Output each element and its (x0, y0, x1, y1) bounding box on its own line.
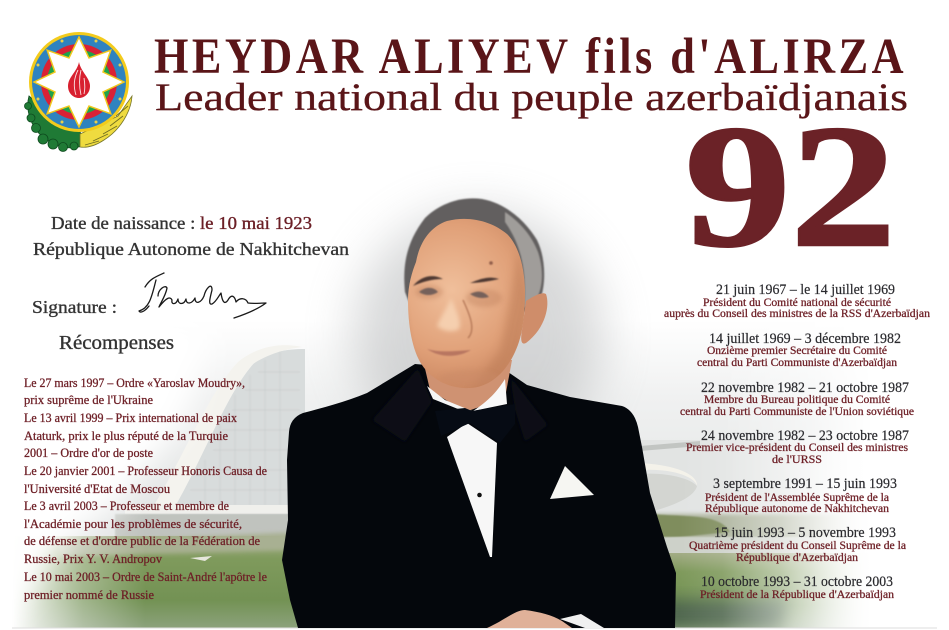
emblem disc: green ring (47, 50, 111, 114)
emblem disc: blue ring (32, 35, 126, 129)
entry 1969-1982: Onzième premier Secrétaire du Comité (707, 345, 887, 357)
left and bottom page margin (0, 300, 949, 630)
awards heading: Récompenses (59, 332, 174, 354)
grey side hair (505, 212, 542, 308)
entry 1993-2003 (700, 574, 894, 601)
birthplace: République Autonome de Nakhitchevan (33, 239, 349, 259)
entry 1982-1987 vice-president: Premier vice-président du Conseil des ministres (686, 442, 908, 454)
eyebrow right (470, 278, 499, 283)
wreath: oak leaves (24, 96, 82, 152)
entry 1993 (689, 525, 906, 564)
signature label: Signature : (32, 297, 117, 317)
shirt front (447, 423, 497, 557)
pocket square (550, 466, 594, 499)
entry 1982-1987 vice-president: 24 novembre 1982 – 23 octobre 1987 (701, 428, 909, 444)
shirt collar left (427, 386, 472, 411)
flame (68, 62, 90, 98)
awards list: l'Université d'Etat de Moscou (24, 482, 170, 496)
hand (487, 610, 572, 628)
awards list: Le 27 mars 1997 – Ordre «Yaroslav Moudry», (24, 376, 245, 390)
national emblem of Azerbaijan (24, 32, 132, 152)
awards list: de défense et d'ordre public de la Fédération de (24, 534, 261, 548)
lapel left (374, 370, 431, 440)
entry 1969-1982 (697, 331, 901, 369)
entry 1991-1993: République autonome de Nakhitchevan (705, 503, 889, 515)
entry 1993-2003: 10 octobre 1993 – 31 octobre 2003 (701, 574, 893, 590)
date of birth: Date de naissance : le 10 mai 1923 (51, 213, 312, 233)
entry 1967-1969 (664, 282, 930, 320)
eye right (470, 292, 489, 298)
awards list: Le 13 avril 1999 – Prix international de paix (24, 411, 237, 425)
awards list: Le 10 mai 2003 – Ordre de Saint-André l'apôtre le (24, 570, 268, 584)
bow tie (435, 404, 515, 443)
jacket (282, 364, 676, 628)
subtitle: Leader national du peuple azerbaïdjanais (155, 76, 908, 119)
entry 1969-1982: central du Parti Communiste d'Azerbaïdjan (697, 357, 897, 369)
awards list: Le 3 avril 2003 – Professeur et membre de (24, 499, 230, 513)
face shading (416, 262, 525, 378)
entry 1982-1987 vice-president (686, 428, 909, 466)
shirt stud (477, 493, 482, 497)
entry 1982-1987 vice-president: de l'URSS (772, 454, 822, 466)
entry 1982-1987 politburo (680, 380, 914, 418)
entry 1982-1987 politburo: Membre du Bureau politique du Comité (704, 394, 890, 406)
entry 1982-1987 politburo: central du Parti Communiste de l'Union soviétique (680, 406, 914, 418)
neck and collar skin (423, 360, 512, 412)
eyebrow left (413, 276, 443, 286)
entry 1993-2003: Président de la République d'Azerbaïdjan (700, 589, 894, 601)
awards list: Russie, Prix Y. V. Andropov (24, 552, 163, 566)
entry 1993: 15 juin 1993 – 5 novembre 1993 (714, 525, 896, 541)
entry 1993: Quatrième président du Conseil Suprême de la (689, 540, 906, 552)
emblem disc: yellow ring (29, 32, 129, 132)
emblem dots (36, 40, 122, 124)
face (408, 219, 525, 388)
flame lines (74, 70, 85, 95)
entry 1991-1993 (705, 476, 897, 515)
entry 1967-1969: Président du Comité national de sécurité (703, 297, 891, 309)
big number 92: 92 (685, 89, 896, 283)
hair (404, 198, 544, 312)
awards list: prix suprême de l'Ukraine (24, 393, 154, 407)
emblem disc: red ring (41, 44, 117, 120)
awards list: l'Académie pour les problèmes de sécurité, (24, 517, 242, 531)
entry 1991-1993: 3 septembre 1991 – 15 juin 1993 (713, 476, 897, 492)
entry 1982-1987 politburo: 22 novembre 1982 – 21 octobre 1987 (701, 380, 909, 396)
nose highlight (437, 298, 460, 331)
awards list (24, 376, 268, 602)
entry 1969-1982: 14 juillet 1969 – 3 décembre 1982 (709, 331, 901, 347)
ear (521, 293, 547, 344)
birth details (33, 213, 349, 259)
shirt collar right (473, 379, 507, 411)
lapel right (512, 382, 546, 440)
white fade over right of the photo (680, 440, 937, 628)
portrait of Heydar Aliyev (282, 198, 676, 628)
background: building and lawn photo (18, 345, 849, 628)
entry 1993: République d'Azerbaïdjan (736, 552, 858, 564)
career timeline (664, 282, 930, 601)
bottom edge line (12, 628, 937, 629)
entry 1967-1969: 21 juin 1967 – le 14 juillet 1969 (716, 282, 895, 298)
wreath: wheat (80, 96, 132, 147)
shirt cuff (560, 614, 604, 628)
awards list: premier nommé de Russie (24, 588, 155, 602)
white fade over upper-left of the photo (0, 290, 215, 630)
jacket lapels (372, 368, 548, 442)
mouth (427, 349, 471, 356)
handwritten signature (139, 273, 266, 318)
eight-pointed star (34, 37, 124, 127)
eye left (419, 288, 438, 295)
entry 1967-1969: auprès du Conseil des ministres de la RSS d'Azerbaïdjan (664, 308, 930, 320)
awards list: Le 20 janvier 2001 – Professeur Honoris Causa de (24, 464, 268, 478)
awards list: 2001 – Ordre d'or de poste (24, 446, 154, 460)
soft shadow around portrait (353, 210, 603, 460)
awards list: Ataturk, prix le plus réputé de la Turquie (24, 429, 229, 443)
mole (489, 261, 493, 265)
entry 1991-1993: Président de l'Assemblée Suprême de la (705, 492, 889, 504)
